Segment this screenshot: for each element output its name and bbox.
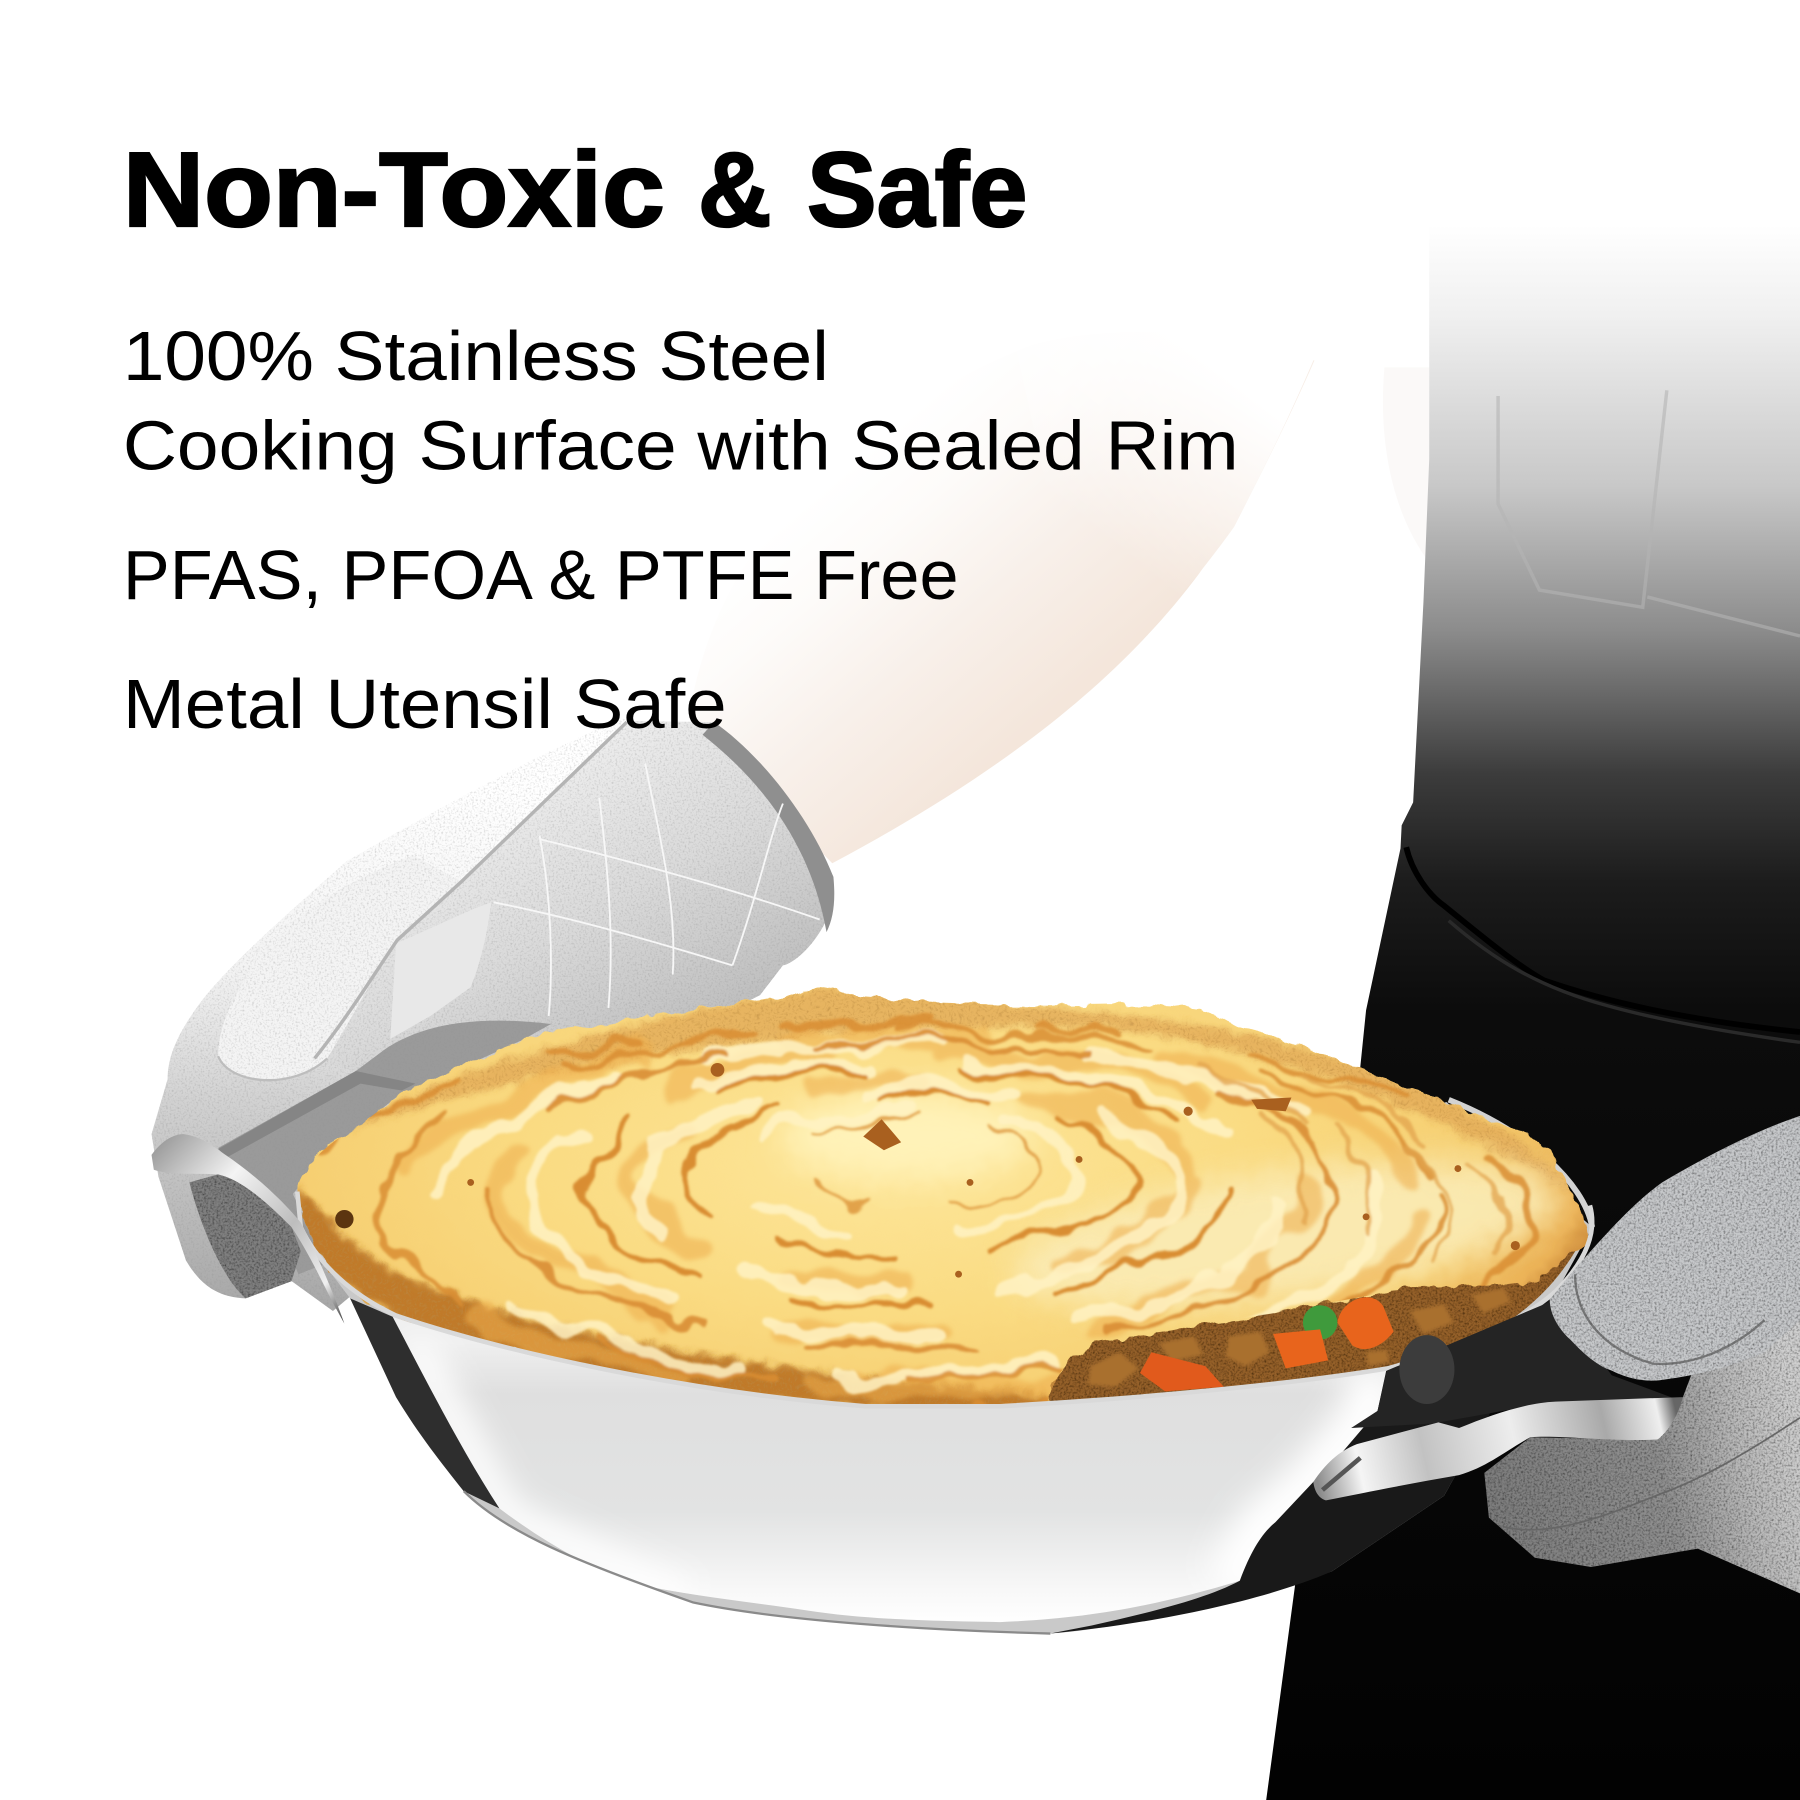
feature list <box>123 317 1239 743</box>
thumb crease <box>1575 1274 1764 1364</box>
mitt thumb lower contour <box>218 1056 327 1080</box>
food: shepherd's pie <box>287 976 1596 1423</box>
carrot left <box>1140 1352 1224 1391</box>
handle bar <box>1313 1397 1683 1500</box>
bottom edge line <box>464 1491 1050 1634</box>
carrot large <box>1337 1297 1394 1349</box>
mitt lower dark panel <box>189 1174 301 1298</box>
right pan handle <box>1313 1299 1683 1500</box>
pan shell <box>310 1102 1592 1634</box>
right oven mitt thumb <box>1550 1116 1800 1381</box>
apron waist band <box>1406 847 1800 1032</box>
browned left edge <box>297 1188 1047 1418</box>
title: Non-Toxic <box>123 131 665 249</box>
pan polished face <box>393 1317 1387 1622</box>
far arm ghost <box>1383 367 1429 562</box>
pale right slope <box>1004 1133 1567 1335</box>
mitt seam <box>315 722 627 1058</box>
browned flecks <box>335 1063 1520 1278</box>
mitt palm and back <box>152 717 627 1311</box>
title <box>123 131 1027 249</box>
mitt quilting <box>494 763 820 1016</box>
pale centre <box>781 1093 1033 1180</box>
carrot middle <box>1273 1329 1328 1368</box>
right shadow side <box>1050 1295 1555 1634</box>
right oven mitt lower <box>1484 1263 1800 1593</box>
feature: PFAS free: PFAS, PFOA & PTFE Free <box>123 536 959 614</box>
pan dark reflections <box>350 1295 1555 1634</box>
left stripe <box>350 1298 499 1508</box>
meat filling <box>1027 1240 1582 1410</box>
title: & <box>698 131 771 249</box>
soft golden shading <box>390 1033 1423 1389</box>
pea <box>1303 1305 1337 1340</box>
meat lumps <box>1088 1288 1511 1387</box>
left pan handle <box>152 1134 344 1324</box>
handle bracket <box>1351 1299 1674 1428</box>
mitt thumb <box>218 855 461 1080</box>
short ridges on right slope <box>1200 1068 1506 1257</box>
left oven mitt <box>152 717 834 1311</box>
mitt cuff <box>703 722 834 932</box>
mitt pleat <box>390 902 491 1039</box>
feature: stainless steel: 100% Stainless Steel <box>123 317 829 395</box>
pan back rim <box>1449 1100 1592 1227</box>
handle rivet <box>1399 1335 1454 1404</box>
mitt shadow under thumb <box>218 1021 551 1274</box>
title: Safe <box>807 131 1027 249</box>
feature: sealed rim: Cooking Surface with Sealed Rim <box>123 407 1239 485</box>
apron and chef torso <box>1266 172 1800 1800</box>
peas and carrots <box>1140 1297 1394 1391</box>
arm <box>689 309 1320 863</box>
feature: metal utensil safe: Metal Utensil Safe <box>123 665 727 743</box>
pan rim <box>297 1192 1592 1406</box>
apron body <box>1266 172 1800 1800</box>
mashed potato topping <box>287 976 1596 1423</box>
mitt quilted body <box>321 721 833 1085</box>
golden crust edge <box>344 987 1575 1194</box>
left pan handle loop <box>218 1071 416 1157</box>
apron chest pocket stitching <box>1498 390 1800 636</box>
spiral ridges <box>287 1022 1527 1412</box>
mitt lower creases <box>1504 1418 1800 1530</box>
